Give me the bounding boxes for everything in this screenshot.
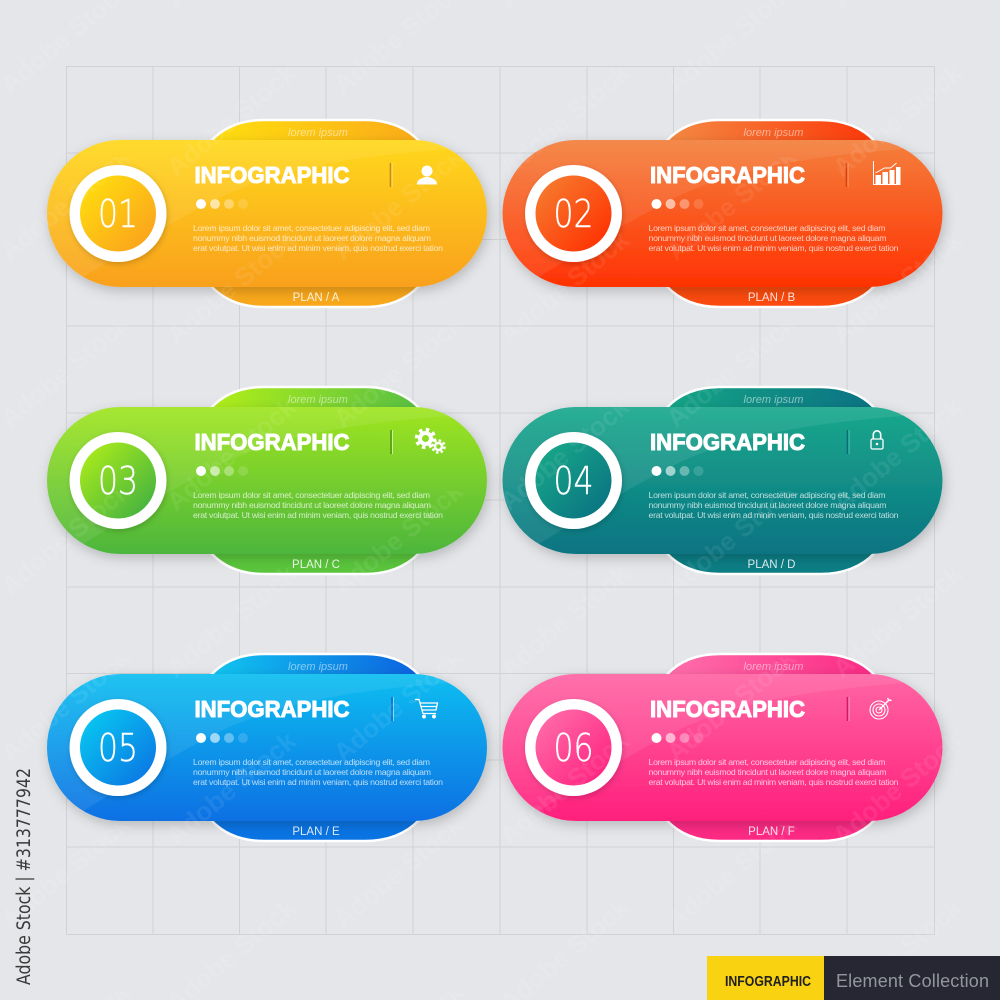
- body text: nonummy nibh euismod tincidunt ut laoreet dolore magna aliquam: [193, 500, 431, 510]
- body text: nonummy nibh euismod tincidunt ut laoreet dolore magna aliquam: [193, 233, 431, 243]
- title: INFOGRAPHIC: [650, 162, 805, 188]
- body text: Lorem ipsum dolor sit amet, consectetuer adipiscing elit, sed diam: [193, 757, 430, 767]
- number badge: [70, 165, 166, 262]
- body text: nonummy nibh euismod tincidunt ut laoreet dolore magna aliquam: [648, 767, 886, 777]
- body text: nonummy nibh euismod tincidunt ut laoreet dolore magna aliquam: [648, 500, 886, 510]
- plan label: PLAN / B: [748, 292, 795, 304]
- title: INFOGRAPHIC: [194, 162, 350, 188]
- body text: Lorem ipsum dolor sit amet, consectetuer adipiscing elit, sed diam: [193, 223, 430, 233]
- top label: lorem ipsum: [744, 394, 803, 406]
- body text: erat volutpat. Ut wisi enim ad minim veniam, quis nostrud exerci tation: [648, 777, 899, 787]
- body text: Lorem ipsum dolor sit amet, consectetuer adipiscing elit, sed diam: [193, 490, 430, 500]
- card 01: [40, 120, 490, 307]
- vertical stock id: Adobe Stock | #313777942: [14, 768, 35, 985]
- dots: [196, 733, 248, 743]
- title: INFOGRAPHIC: [650, 696, 805, 722]
- tab shape: [211, 120, 419, 307]
- number badge: [525, 699, 622, 796]
- pill panel: [502, 674, 942, 821]
- card 02: [496, 120, 946, 307]
- tab shape: [666, 654, 874, 841]
- number badge: 04: [554, 459, 594, 503]
- number badge: 03: [98, 459, 138, 503]
- number badge: [70, 432, 166, 529]
- tab shape: [211, 387, 419, 574]
- plan label: PLAN / F: [748, 826, 795, 838]
- body text: Lorem ipsum dolor sit amet, consectetuer adipiscing elit, sed diam: [648, 223, 886, 233]
- body text: erat volutpat. Ut wisi enim ad minim veniam, quis nostrud exerci tation: [193, 777, 443, 787]
- plan label: PLAN / A: [293, 292, 340, 304]
- icon: shopping cart: [415, 700, 438, 718]
- body text: nonummy nibh euismod tincidunt ut laoreet dolore magna aliquam: [193, 767, 431, 777]
- title: INFOGRAPHIC: [194, 696, 350, 722]
- body text: erat volutpat. Ut wisi enim ad minim veniam, quis nostrud exerci tation: [193, 510, 443, 520]
- dots: [652, 466, 704, 476]
- top label: lorem ipsum: [744, 661, 803, 673]
- dots: [652, 733, 704, 743]
- body text: [193, 223, 443, 253]
- number badge: 02: [554, 192, 594, 236]
- banner title: INFOGRAPHIC: [725, 974, 811, 990]
- top label: lorem ipsum: [744, 127, 803, 139]
- number badge: [70, 699, 166, 796]
- card 05: [40, 654, 490, 841]
- card 03: [40, 387, 490, 574]
- plan label: PLAN / E: [292, 826, 340, 838]
- title: INFOGRAPHIC: [194, 429, 350, 455]
- number badge: [525, 432, 622, 529]
- number badge: 06: [554, 726, 594, 770]
- icon: person: [417, 166, 437, 184]
- pill panel: [502, 407, 942, 554]
- card 06: [496, 654, 946, 841]
- top label: lorem ipsum: [288, 127, 348, 139]
- tab shape: [666, 120, 874, 307]
- dots: [196, 466, 248, 476]
- pill panel: [47, 140, 487, 287]
- plan label: PLAN / D: [748, 559, 795, 571]
- number badge: 01: [98, 192, 138, 236]
- body text: Lorem ipsum dolor sit amet, consectetuer adipiscing elit, sed diam: [648, 490, 886, 500]
- card 04: [496, 387, 946, 574]
- footer banner: [707, 956, 1000, 1000]
- title: INFOGRAPHIC: [650, 429, 805, 455]
- body text: [193, 490, 443, 520]
- body text: erat volutpat. Ut wisi enim ad minim veniam, quis nostrud exerci tation: [648, 510, 899, 520]
- top label: lorem ipsum: [288, 661, 348, 673]
- icon: padlock: [871, 431, 883, 449]
- body text: erat volutpat. Ut wisi enim ad minim veniam, quis nostrud exerci tation: [648, 243, 899, 253]
- banner subtitle: Element Collection: [836, 971, 989, 991]
- body text: Lorem ipsum dolor sit amet, consectetuer adipiscing elit, sed diam: [648, 757, 886, 767]
- dots: [196, 199, 248, 209]
- icon: gears: [416, 430, 444, 452]
- tab shape: [666, 387, 874, 574]
- top label: lorem ipsum: [288, 394, 348, 406]
- pill panel: [47, 674, 487, 821]
- plan label: PLAN / C: [292, 559, 340, 571]
- number badge: [525, 165, 622, 262]
- body text: nonummy nibh euismod tincidunt ut laoreet dolore magna aliquam: [648, 233, 886, 243]
- icon: bar chart: [873, 161, 900, 185]
- body text: [648, 490, 899, 520]
- tab shape: [211, 654, 419, 841]
- number badge: 05: [98, 726, 138, 770]
- body text: [648, 757, 899, 787]
- pill panel: [47, 407, 487, 554]
- body text: erat volutpat. Ut wisi enim ad minim veniam, quis nostrud exerci tation: [193, 243, 443, 253]
- dots: [652, 199, 704, 209]
- pill panel: [502, 140, 942, 287]
- icon: target: [870, 698, 892, 719]
- body text: [648, 223, 899, 253]
- body text: [193, 757, 443, 787]
